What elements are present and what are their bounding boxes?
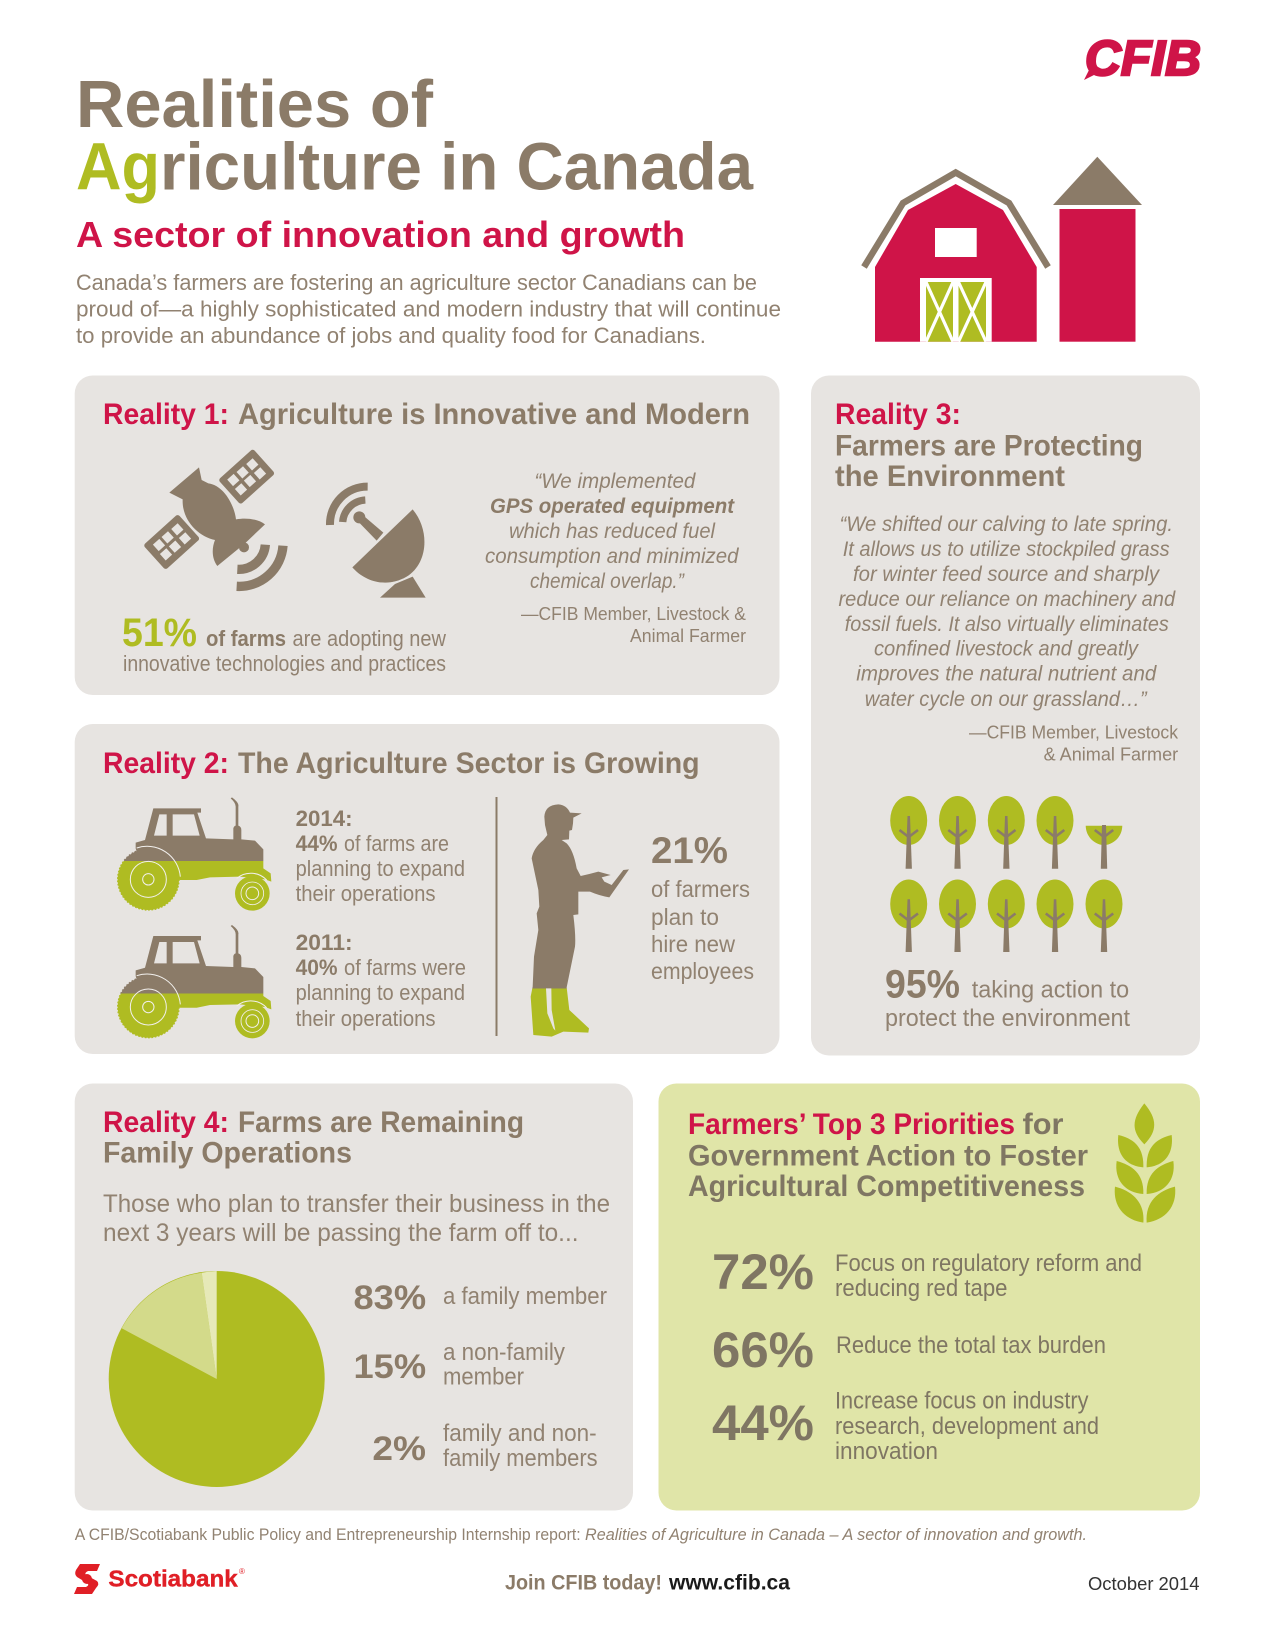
legend: 83%: a family member [443, 1283, 607, 1310]
stat: 51% of farms: innovative technologies and practices [123, 651, 446, 676]
legend: 15% [354, 1339, 565, 1390]
priority: 72%: 72% [712, 1244, 814, 1300]
heading: priorities: Government Action to Foster [688, 1140, 1089, 1173]
heading: reality 4: Farms are Remaining [238, 1106, 524, 1139]
quote: GPS equipment: GPS operated equipment [490, 495, 735, 518]
heading: reality 1: Reality 1: [103, 398, 229, 431]
text: 2014 expansion: 2014: [296, 806, 353, 831]
heading: priorities [688, 1108, 1089, 1203]
quote: calving: for winter feed source and sharply [853, 563, 1160, 586]
pie chart [109, 1271, 325, 1487]
stat: 95% taking action: taking action to [972, 977, 1129, 1004]
source note: Realities of Agriculture in Canada – A sector of innovation and growth. [585, 1526, 1087, 1544]
text: transfer intro: next 3 years will be passing the farm off to... [103, 1219, 578, 1247]
icon: satellite [143, 449, 283, 586]
intro text [76, 270, 781, 348]
intro text: to provide an abundance of jobs and quality food for Canadians. [76, 323, 706, 348]
icon: barn and silo [864, 157, 1142, 342]
icon: wheat [1115, 1103, 1175, 1223]
quote: calving: confined livestock and greatly [874, 638, 1139, 660]
intro text: proud of—a highly sophisticated and modern industry that will continue [76, 296, 781, 322]
call to action: Join CFIB today! [505, 1572, 662, 1594]
stat: 21% hire new employees: hire new [651, 931, 735, 957]
quote attribution [521, 603, 747, 646]
quote attribution: —CFIB Member, Livestock & [521, 603, 747, 624]
legend: 15%: member [443, 1364, 524, 1390]
legend: 2%: family members [443, 1445, 598, 1472]
quote: GPS equipment: consumption and minimized [485, 545, 740, 568]
text: 2011 expansion: of farms were [344, 955, 466, 980]
text: 2014 expansion: 44% [296, 831, 338, 856]
heading: priorities: Agricultural Competitiveness [688, 1170, 1085, 1203]
quote attribution: —CFIB Member, Livestock [969, 722, 1179, 742]
priority: 66% [712, 1322, 1106, 1378]
heading: priorities: for [1022, 1108, 1064, 1141]
quote: calving: improves the natural nutrient and [856, 662, 1158, 686]
stat: 95% taking action [885, 963, 1130, 1032]
stat: 95% taking action: 95% [885, 963, 960, 1007]
icon: tractor 2011 [118, 925, 271, 1038]
heading: reality 4: Family Operations [103, 1136, 352, 1170]
quote: calving: “We shifted our calving to late spring. [840, 513, 1173, 536]
priority: 44%: Increase focus on industry [835, 1388, 1088, 1415]
quote: GPS equipment: which has reduced fuel [509, 520, 716, 543]
text: 2014 expansion: planning to expand [296, 856, 465, 881]
icon: satellite dish [330, 487, 426, 598]
heading: reality 3 [835, 398, 1143, 493]
legend: 15%: 15% [354, 1348, 426, 1386]
Scotiabank logo [74, 1564, 245, 1594]
heading: reality 2: Reality 2: [103, 747, 229, 780]
Scotiabank logo: ® [239, 1567, 245, 1576]
quote: GPS equipment [485, 470, 740, 593]
date: October 2014 [1088, 1574, 1200, 1594]
priority: 44%: innovation [835, 1438, 938, 1465]
stat: 51% of farms: 51% [122, 611, 197, 655]
legend: 83% [354, 1279, 607, 1317]
text: 2014 expansion: their operations [296, 881, 436, 906]
stat: 21% hire new employees: plan to [651, 904, 719, 930]
priority: 66%: Reduce the total tax burden [836, 1332, 1106, 1359]
text: 2014 expansion [296, 806, 465, 906]
text: 2011 expansion: 40% [296, 955, 338, 980]
stat: 51% of farms: of farms [206, 626, 286, 651]
panel: reality 2 [75, 724, 779, 1054]
quote: calving: reduce our reliance on machinery and [838, 588, 1176, 611]
quote: GPS equipment: “We implemented [534, 470, 697, 493]
CFIB logo: CFIB [1085, 32, 1201, 86]
panel: reality 4 [75, 1084, 633, 1510]
title: Ag [76, 130, 160, 204]
legend: 2%: 2% [372, 1430, 426, 1468]
text: transfer intro: Those who plan to transfer their business in the [103, 1190, 610, 1218]
icon: tractor 2014 [118, 797, 271, 911]
legend: 2% [372, 1420, 598, 1472]
icon: farmer with tablet [531, 804, 629, 1037]
quote: calving: water cycle on our grassland…” [865, 688, 1148, 711]
source note: A CFIB/Scotiabank Public Policy and Entrepreneurship Internship report: [75, 1526, 581, 1544]
priority: 44%: 44% [712, 1395, 814, 1451]
call to action: www.cfib.ca [668, 1572, 790, 1594]
panel: reality 3 [811, 376, 1200, 1056]
priority: 44% [712, 1388, 1099, 1465]
stat: 21% hire new employees: 21% [651, 830, 728, 871]
panel: reality 1 [75, 376, 779, 695]
priority: 72%: reducing red tape [835, 1275, 1008, 1302]
priority: 72%: Focus on regulatory reform and [835, 1250, 1142, 1277]
text: 2014 expansion: of farms are [344, 831, 449, 856]
text: 2011 expansion: 2011: [296, 930, 353, 955]
legend: 2%: family and non- [443, 1420, 597, 1447]
title [76, 67, 754, 204]
priority: 72% [712, 1244, 1142, 1302]
quote: calving: It allows us to utilize stockpiled grass [843, 538, 1170, 561]
quote attribution [969, 722, 1179, 764]
intro text: Canada’s farmers are fostering an agriculture sector Canadians can be [76, 270, 757, 295]
quote attribution: Animal Farmer [630, 625, 746, 646]
priority: 66%: 66% [712, 1322, 814, 1378]
heading: reality 3: Reality 3: [835, 398, 961, 431]
heading: reality 1: Agriculture is Innovative and Modern [238, 398, 750, 431]
quote: calving: fossil fuels. It also virtually eliminates [845, 613, 1169, 636]
text: 2011 expansion: their operations [296, 1006, 436, 1031]
heading: priorities: Farmers’ Top 3 Priorities [688, 1108, 1015, 1141]
text: transfer intro [103, 1190, 610, 1247]
legend: 15%: a non-family [443, 1339, 565, 1366]
call to action [505, 1572, 790, 1594]
panel: top 3 priorities [658, 1084, 1200, 1510]
text: 2011 expansion [296, 930, 466, 1031]
quote attribution: & Animal Farmer [1044, 744, 1178, 764]
priority: 44%: research, development and [835, 1413, 1099, 1440]
icon: trees [890, 796, 1122, 952]
title: Realities of [76, 67, 434, 142]
heading: reality 3: Farmers are Protecting [835, 430, 1143, 462]
stat: 51% of farms: are adopting new [292, 626, 446, 651]
quote: GPS equipment: chemical overlap.” [530, 570, 685, 593]
Scotiabank logo: Scotiabank [108, 1566, 238, 1592]
title: riculture in Canada [160, 130, 754, 204]
source note [75, 1526, 1087, 1544]
stat: 21% hire new employees [651, 830, 754, 984]
heading: reality 4 [103, 1106, 524, 1170]
text: 2011 expansion: planning to expand [296, 980, 465, 1005]
heading: reality 3: the Environment [835, 460, 1065, 493]
subtitle: A sector of innovation and growth [76, 214, 685, 255]
stat: 21% hire new employees: of farmers [651, 876, 750, 902]
stat: 95% taking action: protect the environment [885, 1005, 1130, 1032]
stat: 21% hire new employees: employees [651, 958, 754, 984]
stat: 51% of farms [122, 611, 446, 676]
heading: reality 2: The Agriculture Sector is Growing [238, 747, 700, 780]
quote: calving [838, 513, 1176, 711]
legend: 83%: 83% [354, 1279, 426, 1317]
heading: reality 4: Reality 4: [103, 1106, 229, 1139]
